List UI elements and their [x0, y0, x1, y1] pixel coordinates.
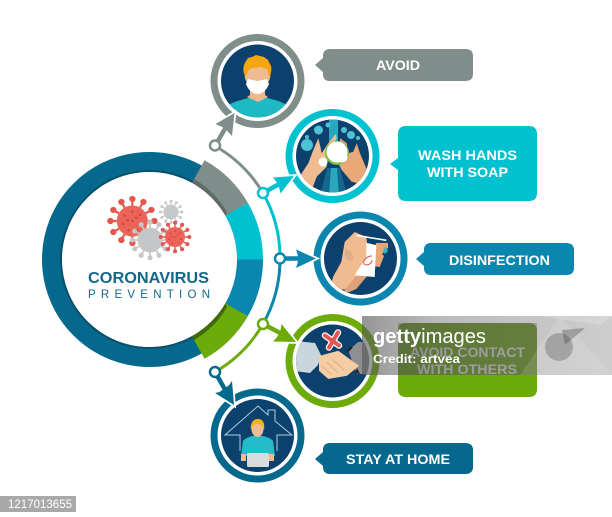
icon: red cross [325, 332, 339, 348]
virus: red small [161, 223, 189, 251]
ring segment: cyan [225, 203, 263, 260]
icon: person at home [225, 406, 292, 467]
label: disinfection: DISINFECTION [449, 253, 550, 268]
virus: red large [110, 199, 154, 243]
icon: handshake [294, 332, 370, 379]
title [88, 270, 210, 301]
label: avoid contact: WITH OTHERS [417, 362, 517, 377]
icon: person with mask [230, 55, 286, 118]
heading: CORONAVIRUS [88, 270, 209, 287]
virus: gray large [132, 222, 168, 258]
label: stay at home [315, 443, 473, 474]
arrow: to disinfection [275, 250, 316, 268]
image id tag [0, 496, 76, 512]
ring segment: green [192, 303, 248, 359]
subheading: PREVENTION [88, 289, 210, 301]
green segment shadow [192, 303, 227, 340]
circle: disinfection [317, 215, 404, 302]
ring inner shadow [61, 171, 238, 348]
ring segment: blue [225, 260, 263, 316]
icon: washing hands [301, 120, 366, 192]
ring center [62, 172, 237, 347]
label: disinfection [416, 243, 574, 275]
label: wash hands [390, 126, 537, 201]
label: stay at home: STAY AT HOME [346, 452, 450, 467]
watermark credit: Credit: artvea [373, 354, 461, 366]
circle: wash hands [289, 112, 376, 200]
label: avoid [315, 49, 473, 81]
arrow: to stay at home [210, 367, 234, 405]
main ring [52, 160, 263, 359]
watermark band [362, 316, 612, 375]
watermark logo: gettyimages [373, 326, 486, 348]
ring segment: gray [192, 160, 248, 216]
circle: avoid [214, 38, 301, 125]
connector arcs [215, 146, 280, 372]
label: wash hands: WITH SOAP [427, 165, 508, 180]
label: avoid contact [398, 323, 537, 397]
circle: stay at home [214, 392, 301, 479]
virus: gray small [160, 201, 182, 223]
gray segment shadow [192, 179, 227, 216]
arrow: to avoid [210, 113, 234, 150]
virus illustration [110, 199, 189, 258]
label: avoid contact: AVOID CONTACT [410, 345, 526, 360]
image id tag: 1217013655 [8, 499, 72, 511]
label: avoid: AVOID [376, 58, 420, 73]
arrow: to avoid contact [258, 319, 296, 342]
arrow: to wash hands [258, 176, 294, 198]
label: wash hands: WASH HANDS [418, 148, 517, 163]
icon: hand sanitizer spray [330, 232, 388, 296]
circle: avoid contact [289, 318, 376, 404]
